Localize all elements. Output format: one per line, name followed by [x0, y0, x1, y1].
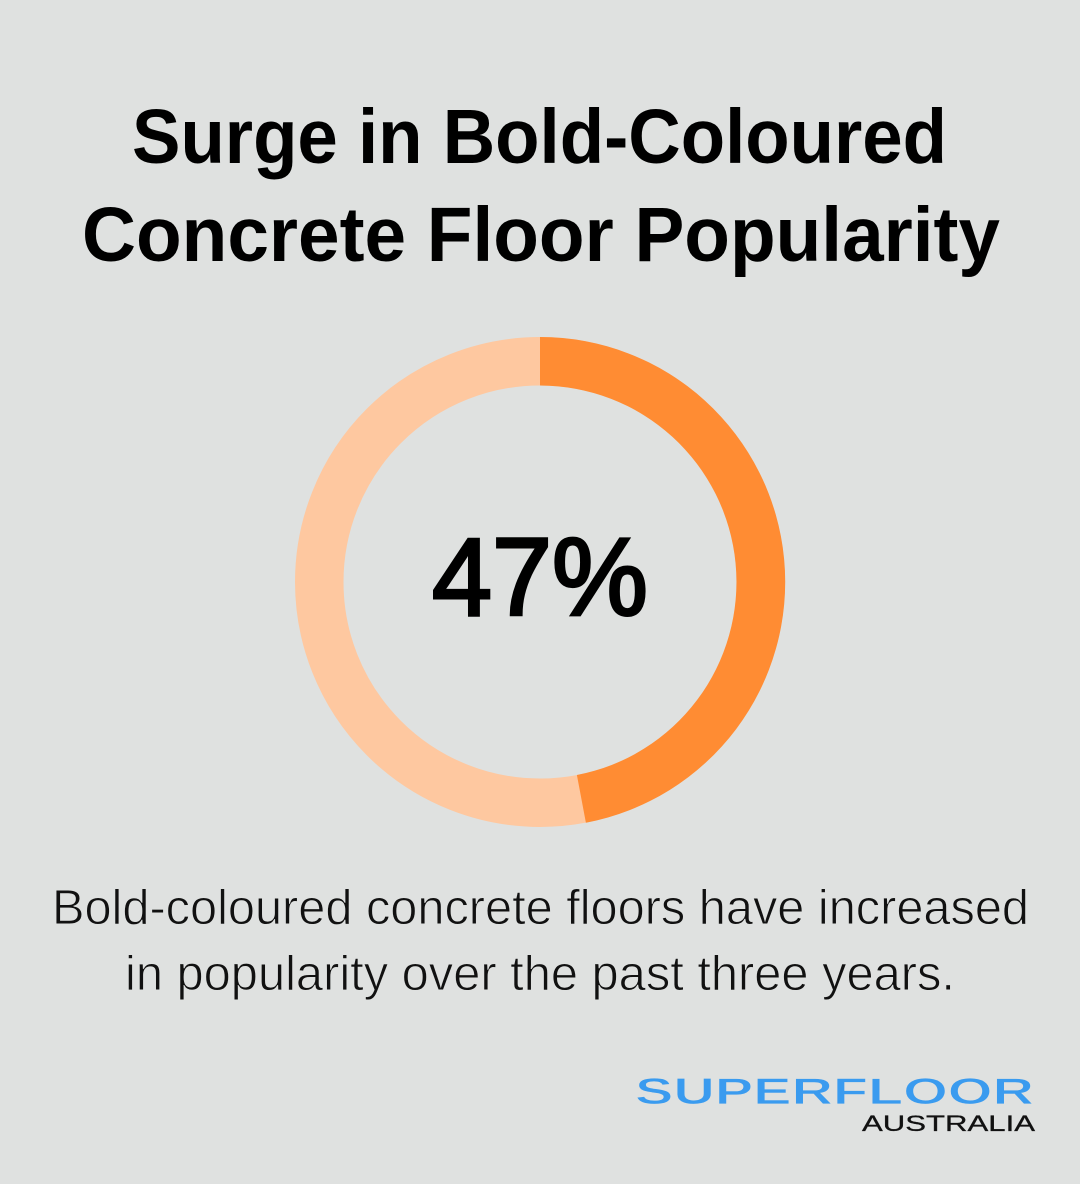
logo subtitle: AUSTRALIA	[862, 1111, 1035, 1136]
logo wordmark: SUPERFLOOR	[635, 1071, 1034, 1112]
donut chart: 47%	[319, 337, 785, 823]
donut value label: 47%	[432, 516, 648, 639]
logo: Superfloor Australia	[635, 1071, 1035, 1136]
title: Surge in Bold-Coloured	[132, 94, 947, 180]
description text: in popularity over the past three years.	[125, 947, 955, 1001]
title	[82, 94, 1000, 278]
title: Concrete Floor Popularity	[82, 192, 1000, 278]
description text	[52, 881, 1029, 1001]
description text: Bold-coloured concrete floors have increased	[52, 881, 1029, 935]
donut value arc	[540, 337, 785, 823]
donut track	[319, 361, 761, 803]
